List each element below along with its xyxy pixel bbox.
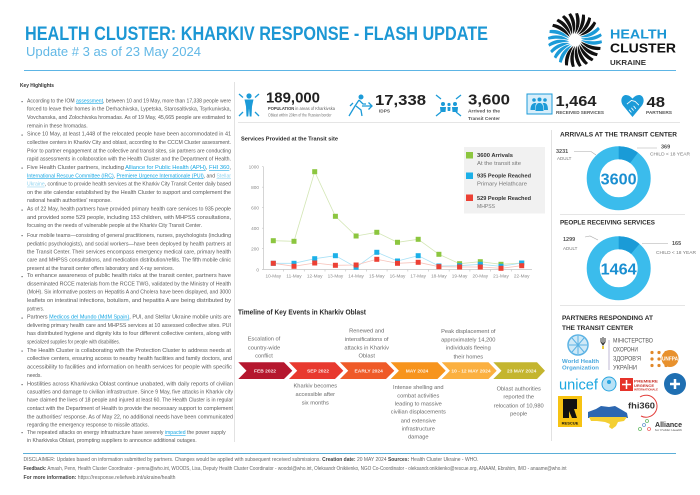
chart legend: Primary Helathcare <box>477 182 527 188</box>
stat: IDPs: 17,338 <box>375 92 426 109</box>
label: adult arrivals: ADULT <box>557 156 572 161</box>
heading: partners <box>562 315 653 332</box>
series: arrivals <box>271 169 524 267</box>
logo wordmark <box>610 26 677 67</box>
bullet: IOM assessment <box>27 98 231 130</box>
bullet: hostilities: casualties and damage to civilian infrastructure. Since 9 May, five attacks in Kharkiv city <box>27 390 233 396</box>
event: early 2024: intensifications of <box>345 337 389 343</box>
subtitle: update date: Update # 3 as of 23 May 2024 <box>26 44 201 59</box>
bullet: protection cluster <box>27 348 232 379</box>
event: May 2024: combat activities <box>397 393 439 399</box>
donut chart: services: 1464 <box>601 262 637 278</box>
label: child services <box>642 241 697 255</box>
bullet: five partners: on the site calendar established by the Health Cluster to support and complement the <box>27 190 231 196</box>
chart axes and labels: 600 <box>251 206 259 210</box>
stat: IDPs: IDPS <box>379 108 390 114</box>
logo: Ministry of Health of Ukraine: ЗДОРОВ'Я <box>613 356 641 362</box>
chart axes and labels: 200 <box>251 246 259 252</box>
stat: partners: 48 <box>646 94 665 111</box>
icon: handshake heart <box>621 95 644 117</box>
title: HEALTH CLUSTER: KHARKIV RESPONSE - FLASH UPDATE <box>25 23 488 45</box>
bullet: public health awareness: leaflets on intestinal infections, botulism, and hepatitis A are being distributed by <box>27 298 231 304</box>
bullet: primary health care: focusing on the needs of vulnerable people at the Kharkiv City Transit Center. <box>27 223 202 229</box>
chart legend: At the transit site <box>477 161 521 167</box>
event: Sep 2022: accessible after <box>296 392 335 398</box>
footer: disclaimer and contacts: DISCLAIMER: Updates based on information submitted by partners. Changes would be applied with subsequent received submissions. Creation date: 20 MAY 2024 Sources: Health Cluster Ukraine - WHO. <box>24 457 478 463</box>
chart axes and labels: 400 <box>251 226 259 231</box>
event: May 2024: leading to massive <box>395 401 442 407</box>
logo: Ministry of Health of Ukraine: МІНІСТЕРСТВО <box>613 338 653 344</box>
bullet: public health awareness <box>27 273 231 313</box>
bullet: five partners: International Rescue Committee (IRC), Premiere Urgence Internationale (PUI), and Stellar <box>27 173 231 179</box>
stat: partners <box>646 94 672 115</box>
event: 23 May 2024: people <box>510 411 527 417</box>
logo wordmark: HEALTH <box>610 26 667 41</box>
bullet: protection cluster: The Health Cluster is collaborating with the Protection Cluster to address needs at <box>27 348 231 354</box>
logo: Premiere Urgence Internationale: PREMIERE <box>634 380 659 384</box>
stat: population: Oblast within 20km of the Russian border <box>268 112 332 118</box>
event: 23 May 2024: Oblast authorities <box>497 386 541 392</box>
logo: Premiere Urgence Internationale <box>620 378 659 392</box>
bullet: relocated people: Prior to partner engagement at the collective and transit sites, six partners are conducting <box>27 148 231 154</box>
bullet: protection cluster: accessibility to facilities and information on health services for people with specific <box>27 364 232 370</box>
heading: people receiving services: PEOPLE RECEIVING SERVICES <box>560 220 656 226</box>
panel: arrivals donut <box>556 132 691 204</box>
bullet: primary health care: As of 22 May, health partners have provided primary health care services to 935 people <box>27 207 231 213</box>
bullet: hostilities: have claimed the lives of 18 people and injured at least 60. The Health Cluster is in regular <box>27 398 233 404</box>
bullet: public health awareness: partners. <box>27 307 44 313</box>
bullet: primary health care: and provided some 529 people, including 153 children, with MHPSS consultations, <box>27 215 231 221</box>
label: child arrivals: 369 <box>661 144 670 150</box>
bullet: relocated people: Since 10 May, at least 1,448 of the relocated people have been accommodated in 41 <box>27 132 231 138</box>
bullet: IOM assessment: According to the IOM assessment, between 10 and 19 May, more than 17,338 people were <box>27 98 231 104</box>
icon: displaced person <box>349 94 372 116</box>
stat: received services <box>556 93 604 115</box>
label: child arrivals: CHILD < 18 YEAR <box>650 152 691 156</box>
stat: population <box>266 90 336 118</box>
event: 10-12 May 2024: their homes <box>453 354 483 360</box>
logo: Ukraine map <box>588 406 628 429</box>
timeline chevrons: MAY 2024 <box>406 368 429 374</box>
panel: partners at the transit center <box>558 315 686 432</box>
event: Feb 2022: Escalation of <box>248 337 281 343</box>
timeline chevrons <box>238 362 545 379</box>
label: child arrivals <box>637 144 691 156</box>
chart legend <box>464 147 545 214</box>
bullet: five partners: national health authorities' response. <box>27 198 112 204</box>
bullet: mobile units: Partners Medicos del Mundo (MdM Spain), PUI, and Stellar Ukraine mobile units are <box>27 315 231 321</box>
icon: swirl emblem <box>548 13 602 67</box>
panel: key highlights text <box>22 98 233 444</box>
bullet: energy infrastructure: in Kharkivska Oblast, prompting suppliers to announce additional outages. <box>27 438 197 444</box>
bullet: hostilities <box>27 381 233 429</box>
chart axes and labels: 18-May <box>431 274 447 278</box>
label: child services: CHILD < 18 YEAR <box>656 250 697 255</box>
logo: Alliance for Public Health: Alliance <box>655 422 682 429</box>
event: 23 May 2024: relocation of 10,980 <box>494 403 544 409</box>
chart axes and labels: 22-May <box>514 274 530 278</box>
timeline chevrons: FEB 2022 <box>254 368 276 374</box>
chart axes and labels: 16-May <box>390 274 406 278</box>
stat: population: POPULATION in areas of Kharkivska <box>268 106 336 111</box>
event: 10-12 May 2024: individuals fleeing <box>446 346 491 352</box>
label: adult services: ADULT <box>563 246 578 251</box>
bullet: hostilities: contact with the Department of Health to provide the necessary support to complement <box>27 406 233 412</box>
event: May 2024: and extensive <box>401 418 436 424</box>
event: 10-12 May 2024: approximately 14,200 <box>441 337 495 343</box>
logo: Health Cluster Ukraine <box>548 13 677 67</box>
bullet: five partners: Five Health Cluster partners, including Alliance for Public Health (APH) , FHI 360, <box>27 165 231 171</box>
stat: partners: PARTNERS <box>646 110 672 115</box>
icon: population person <box>239 93 259 116</box>
logo wordmark: UKRAINE <box>610 60 646 67</box>
chart legend: 529 People Reached <box>477 196 531 202</box>
timeline chevrons: 10 - 12 MAY 2024 <box>451 368 491 374</box>
chart axes and labels: 15-May <box>369 274 385 278</box>
timeline chevrons: 23 MAY 2024 <box>507 368 537 374</box>
chart axes and labels: 21-May <box>493 274 509 278</box>
bullet: IOM assessment: forced to leave their homes in the Derhachivska, Lypetska, Starosaltivska, Tsyrkunivska, <box>27 106 231 112</box>
stat: arrivals: 3,600 <box>468 92 510 108</box>
logo: UNFPA: UNFPA <box>662 356 678 362</box>
logo: World Health Organization <box>562 335 600 372</box>
stat: arrivals: Arrived to the <box>468 108 501 114</box>
bullet: primary health care <box>27 207 231 229</box>
event: early 2024: Oblast <box>358 354 375 360</box>
event: May 2024: civilian displacements <box>391 410 446 416</box>
event: May 2024: Intense shelling and <box>393 385 444 391</box>
heading: services provided: Services Provided at the Transit site <box>241 136 339 142</box>
chart legend: MHPSS <box>477 204 495 210</box>
event: Feb 2022: conflict <box>255 354 273 360</box>
panel: timeline <box>238 310 545 441</box>
bullet: protection cluster: needs. <box>27 373 42 379</box>
panel: people receiving services donut <box>560 220 697 294</box>
heading: partners: THE TRANSIT CENTER <box>562 325 633 332</box>
bullet: mobile units: has distributed hygiene and dignity kits to four different collective centers, along with <box>27 331 231 337</box>
logo: World Health Organization: World Health <box>562 359 600 365</box>
stat: population: 189,000 <box>266 90 320 106</box>
logo: International Rescue Committee: RESCUE <box>562 420 579 426</box>
bullet: IOM assessment: Vovchanska, and Zolochivska hromadas. As of 19 May, 45,665 people are estimated to <box>27 115 231 121</box>
footer: disclaimer and contacts: Feedback: Amash, Penn, Health Cluster Coordinator - penna@who.int, WOODS, Lisa, Deputy Health Cluster Coordinator - woodsl@who.int, Oleksandr Onikiienko, NGO Co-Coordinator - oleksandr.onikiienko@rescue.org, ANAAM, Ebrahim, IMO - anaame@who.int <box>24 466 567 472</box>
logo: Premiere Urgence Internationale: INTERNATIONALE <box>634 388 658 392</box>
bullet markers <box>22 101 23 433</box>
event: May 2024: damage <box>408 435 429 441</box>
panel: headline figures <box>239 90 672 121</box>
bullet: mobile teams: the Transit Center. Their services encompass emergency medical care, primary health <box>27 249 231 255</box>
heading: partners: PARTNERS RESPONDING AT <box>562 315 653 322</box>
event: early 2024: Renewed and <box>349 329 384 335</box>
logo: FHI 360: fhi360 <box>628 402 656 410</box>
bullet: relocated people <box>27 132 231 163</box>
panel: services line chart <box>241 136 545 278</box>
logo: Medicos del Mundo <box>664 373 686 395</box>
chart axes and labels: 11-May <box>286 274 302 278</box>
chart axes and labels: 800 <box>251 185 259 190</box>
logo: Ministry of Health of Ukraine: ОХОРОНИ <box>613 346 638 354</box>
bullet: five partners <box>27 165 231 204</box>
logo: World Health Organization: Organization <box>562 366 600 372</box>
bullet: five partners: Ukraine, continue to provide health services at the Kharkiv City Transit Center daily based <box>27 182 231 188</box>
bullet: public health awareness: disseminated RCCE materials from the RCCE TWG, validated by the Ministry of Health <box>27 281 231 287</box>
heading: key highlights: Key Highlights <box>20 83 54 89</box>
chart legend: 935 People Reached <box>477 174 531 180</box>
event: 23 May 2024: reported the <box>503 395 534 401</box>
bullet: protection cluster: collective centers, ensuring access to nearby health facilities and family doctors, and <box>27 356 232 362</box>
label: child services: 165 <box>672 241 681 247</box>
chart axes and labels: 20-May <box>472 274 489 278</box>
logo: Premiere Urgence Internationale: URGENCE <box>634 384 654 388</box>
bullet: IOM assessment: remain in these hromadas. <box>27 124 88 130</box>
timeline chevrons: EARLY 2024 <box>355 368 383 374</box>
label: adult arrivals: 3231 <box>556 149 568 155</box>
chart axes and labels: 1000 <box>249 164 259 170</box>
chart axes and labels: 14-May <box>348 274 365 278</box>
bullet: hostilities: Hostilities across Kharkivska Oblast continue unabated, with daily reports of civilian <box>27 381 233 387</box>
bullet: mobile teams: Four mobile teams—consisting of general practitioners, nurses, psychologists (including <box>27 233 231 239</box>
chart axes and labels: 17-May <box>410 274 427 278</box>
bullet: mobile units: delivering primary health care and MHPSS services at 10 assessed collective sites. PUI <box>27 323 231 329</box>
heading: arrivals: ARRIVALS AT THE TRANSIT CENTER <box>560 132 677 138</box>
bullet: mobile units: specialized supplies for people with disabilities. <box>27 339 120 345</box>
bullet: hostilities: the authorities' response. As of May 22, no additional needs have been communicated <box>27 414 233 420</box>
bullet: mobile teams: pediatric psychologists), and social workers—have been deployed by health partners at <box>27 241 231 247</box>
donut chart: arrivals: 3600 <box>601 172 637 188</box>
logo: UNICEF: unicef <box>559 376 599 394</box>
chart axes and labels: 12-May <box>307 274 323 278</box>
bullet: hostilities: regarding the emergency response to missile attacks. <box>27 423 149 429</box>
label: adult services: 1299 <box>563 237 575 243</box>
bullet: public health awareness: To enhance awareness of public health risks at the transit center, partners have <box>27 273 231 279</box>
bullet: energy infrastructure: The repeated attacks on energy infrastructure have severely impacted the power supply <box>27 430 226 436</box>
footer: disclaimer and contacts: For more information: https://response.reliefweb.int/ukraine/health <box>24 475 176 481</box>
icon: received services <box>527 94 552 114</box>
event: May 2024: infrastructure <box>402 426 435 432</box>
chart axes and labels: 19-May <box>452 274 468 278</box>
chart axes and labels: 10-May <box>265 274 282 278</box>
event: early 2024: attacks in Kharkiv <box>344 345 389 351</box>
stat: arrivals: Transit Center <box>468 116 500 121</box>
bullet: public health awareness: (MoH). Six informative posters on Hepatitis A and Cholera have been displayed, and 3000 <box>27 289 231 295</box>
label: adult services <box>563 236 598 251</box>
logo: Ministry of Health of Ukraine: УКРАЇНИ <box>613 364 637 372</box>
logo: Alliance for Public Health <box>638 420 682 432</box>
bullet: relocated people: collective centers in Kharkiv City and oblast, according to the CCCM Cluster assessment. <box>27 140 231 146</box>
label: adult arrivals <box>556 149 596 161</box>
series: MHPSS <box>271 257 524 271</box>
logo: Alliance for Public Health: for Public Health <box>655 428 682 432</box>
stat: arrivals <box>468 92 510 121</box>
chart axes and labels <box>249 164 532 278</box>
heading: timeline: Timeline of Key Events in Kharkiv Oblast <box>238 310 367 316</box>
bullet: mobile teams: present at the transit center offers laboratory and X-ray services. <box>27 266 174 272</box>
bullet: mobile teams <box>27 233 231 272</box>
logo wordmark: CLUSTER <box>610 40 677 55</box>
timeline chevrons: SEP 2022 <box>307 368 329 374</box>
bullet: mobile teams: care and MHPSS consultations, and medication distribution/refills. The fifth mobile clinic <box>27 258 231 264</box>
event: Sep 2022: six months <box>302 400 329 406</box>
icon: arrivals group <box>436 95 461 116</box>
bullet: mobile units <box>27 315 231 345</box>
bullet: relocated people: rapid assessments in collaboration with the Health Cluster and the Department of Health. <box>27 157 231 163</box>
chart axes and labels: 0 <box>256 268 259 272</box>
bullet: energy infrastructure <box>27 430 226 444</box>
event: 10-12 May 2024: Peak displacement of <box>441 329 496 335</box>
event: Feb 2022: country-wide <box>248 345 280 351</box>
series: primary healthcare <box>271 250 524 270</box>
logo: Ministry of Health of Ukraine <box>601 337 653 372</box>
timeline event descriptions <box>248 329 544 441</box>
event: Sep 2022: Kharkiv becomes <box>293 384 337 390</box>
stat: received services: 1,464 <box>556 93 597 110</box>
chart legend: 3600 Arrivals <box>477 153 513 159</box>
chart axes and labels: 13-May <box>328 274 344 278</box>
footer: disclaimer and contacts <box>24 457 567 481</box>
stat: received services: RECEIVED SERVICES <box>556 110 604 115</box>
